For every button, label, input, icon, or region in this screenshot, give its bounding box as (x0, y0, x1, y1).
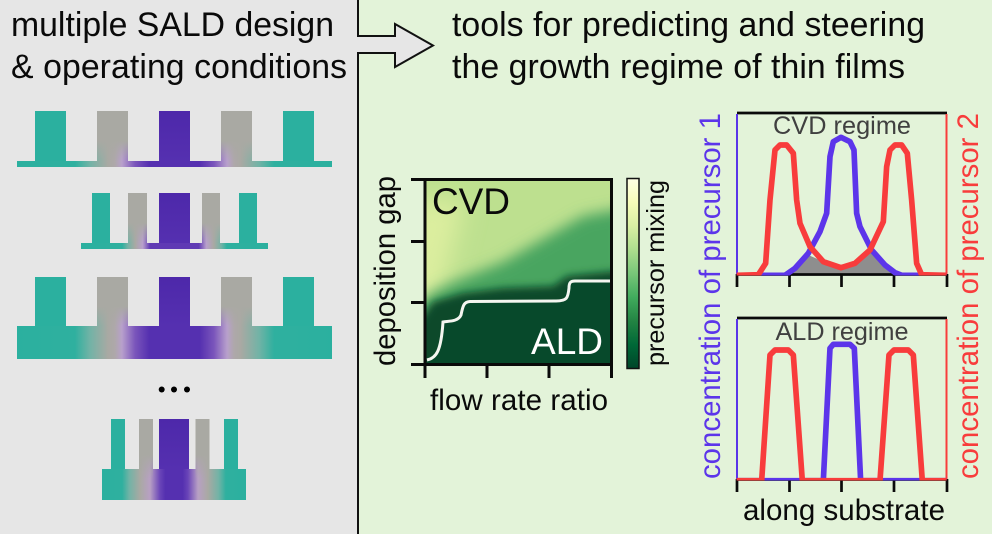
ellipsis dots (159, 386, 190, 392)
SALD head 1 (17, 111, 332, 167)
heatmap: precursor mixing (405, 179, 625, 380)
heading: left (11, 6, 347, 86)
CVD axes (737, 113, 947, 287)
axis label: along substrate: along substrate (743, 494, 945, 527)
contour line (427, 281, 610, 360)
SALD head 2 (81, 193, 268, 249)
shaded overlap (790, 252, 895, 273)
heading: right: the growth regime of thin films (452, 48, 905, 86)
ALD regime title: ALD regime (776, 318, 908, 346)
heading: left: multiple SALD design (11, 6, 334, 44)
SALD head 3 (17, 277, 332, 359)
panel: tools background (358, 0, 992, 534)
ALD axes (737, 318, 947, 492)
divider with arrow (352, 0, 433, 534)
colorbar label: precursor mixing (642, 180, 670, 366)
axis label: concentration of precursor 1: concentration of precursor 1 (694, 113, 727, 479)
axis label: flow rate ratio: flow rate ratio (430, 384, 608, 417)
CVD precursor curves (737, 137, 947, 275)
heading: left: & operating conditions (11, 48, 347, 86)
ALD precursor 1 curve (737, 344, 947, 481)
colorbar (627, 178, 639, 368)
axis label: deposition gap: deposition gap (370, 176, 402, 366)
heading: right: tools for predicting and steering (452, 6, 925, 44)
CVD precursor 2 curve (737, 145, 947, 275)
chart: CVD regime (737, 112, 947, 287)
regime label: CVD: CVD (432, 181, 510, 222)
heading: right (452, 6, 925, 86)
SALD head 4 (102, 419, 246, 500)
axis label: concentration of precursor 2: concentration of precursor 2 (952, 113, 985, 479)
ALD precursor curves (737, 344, 947, 481)
CVD precursor 1 curve (737, 137, 947, 275)
regime label: ALD: ALD (531, 321, 603, 362)
chart: ALD regime (737, 318, 947, 492)
heatmap axes (411, 179, 612, 378)
ALD precursor 2 curve (737, 350, 947, 481)
CVD regime title: CVD regime (773, 112, 911, 140)
panel: operating conditions background (0, 0, 358, 534)
